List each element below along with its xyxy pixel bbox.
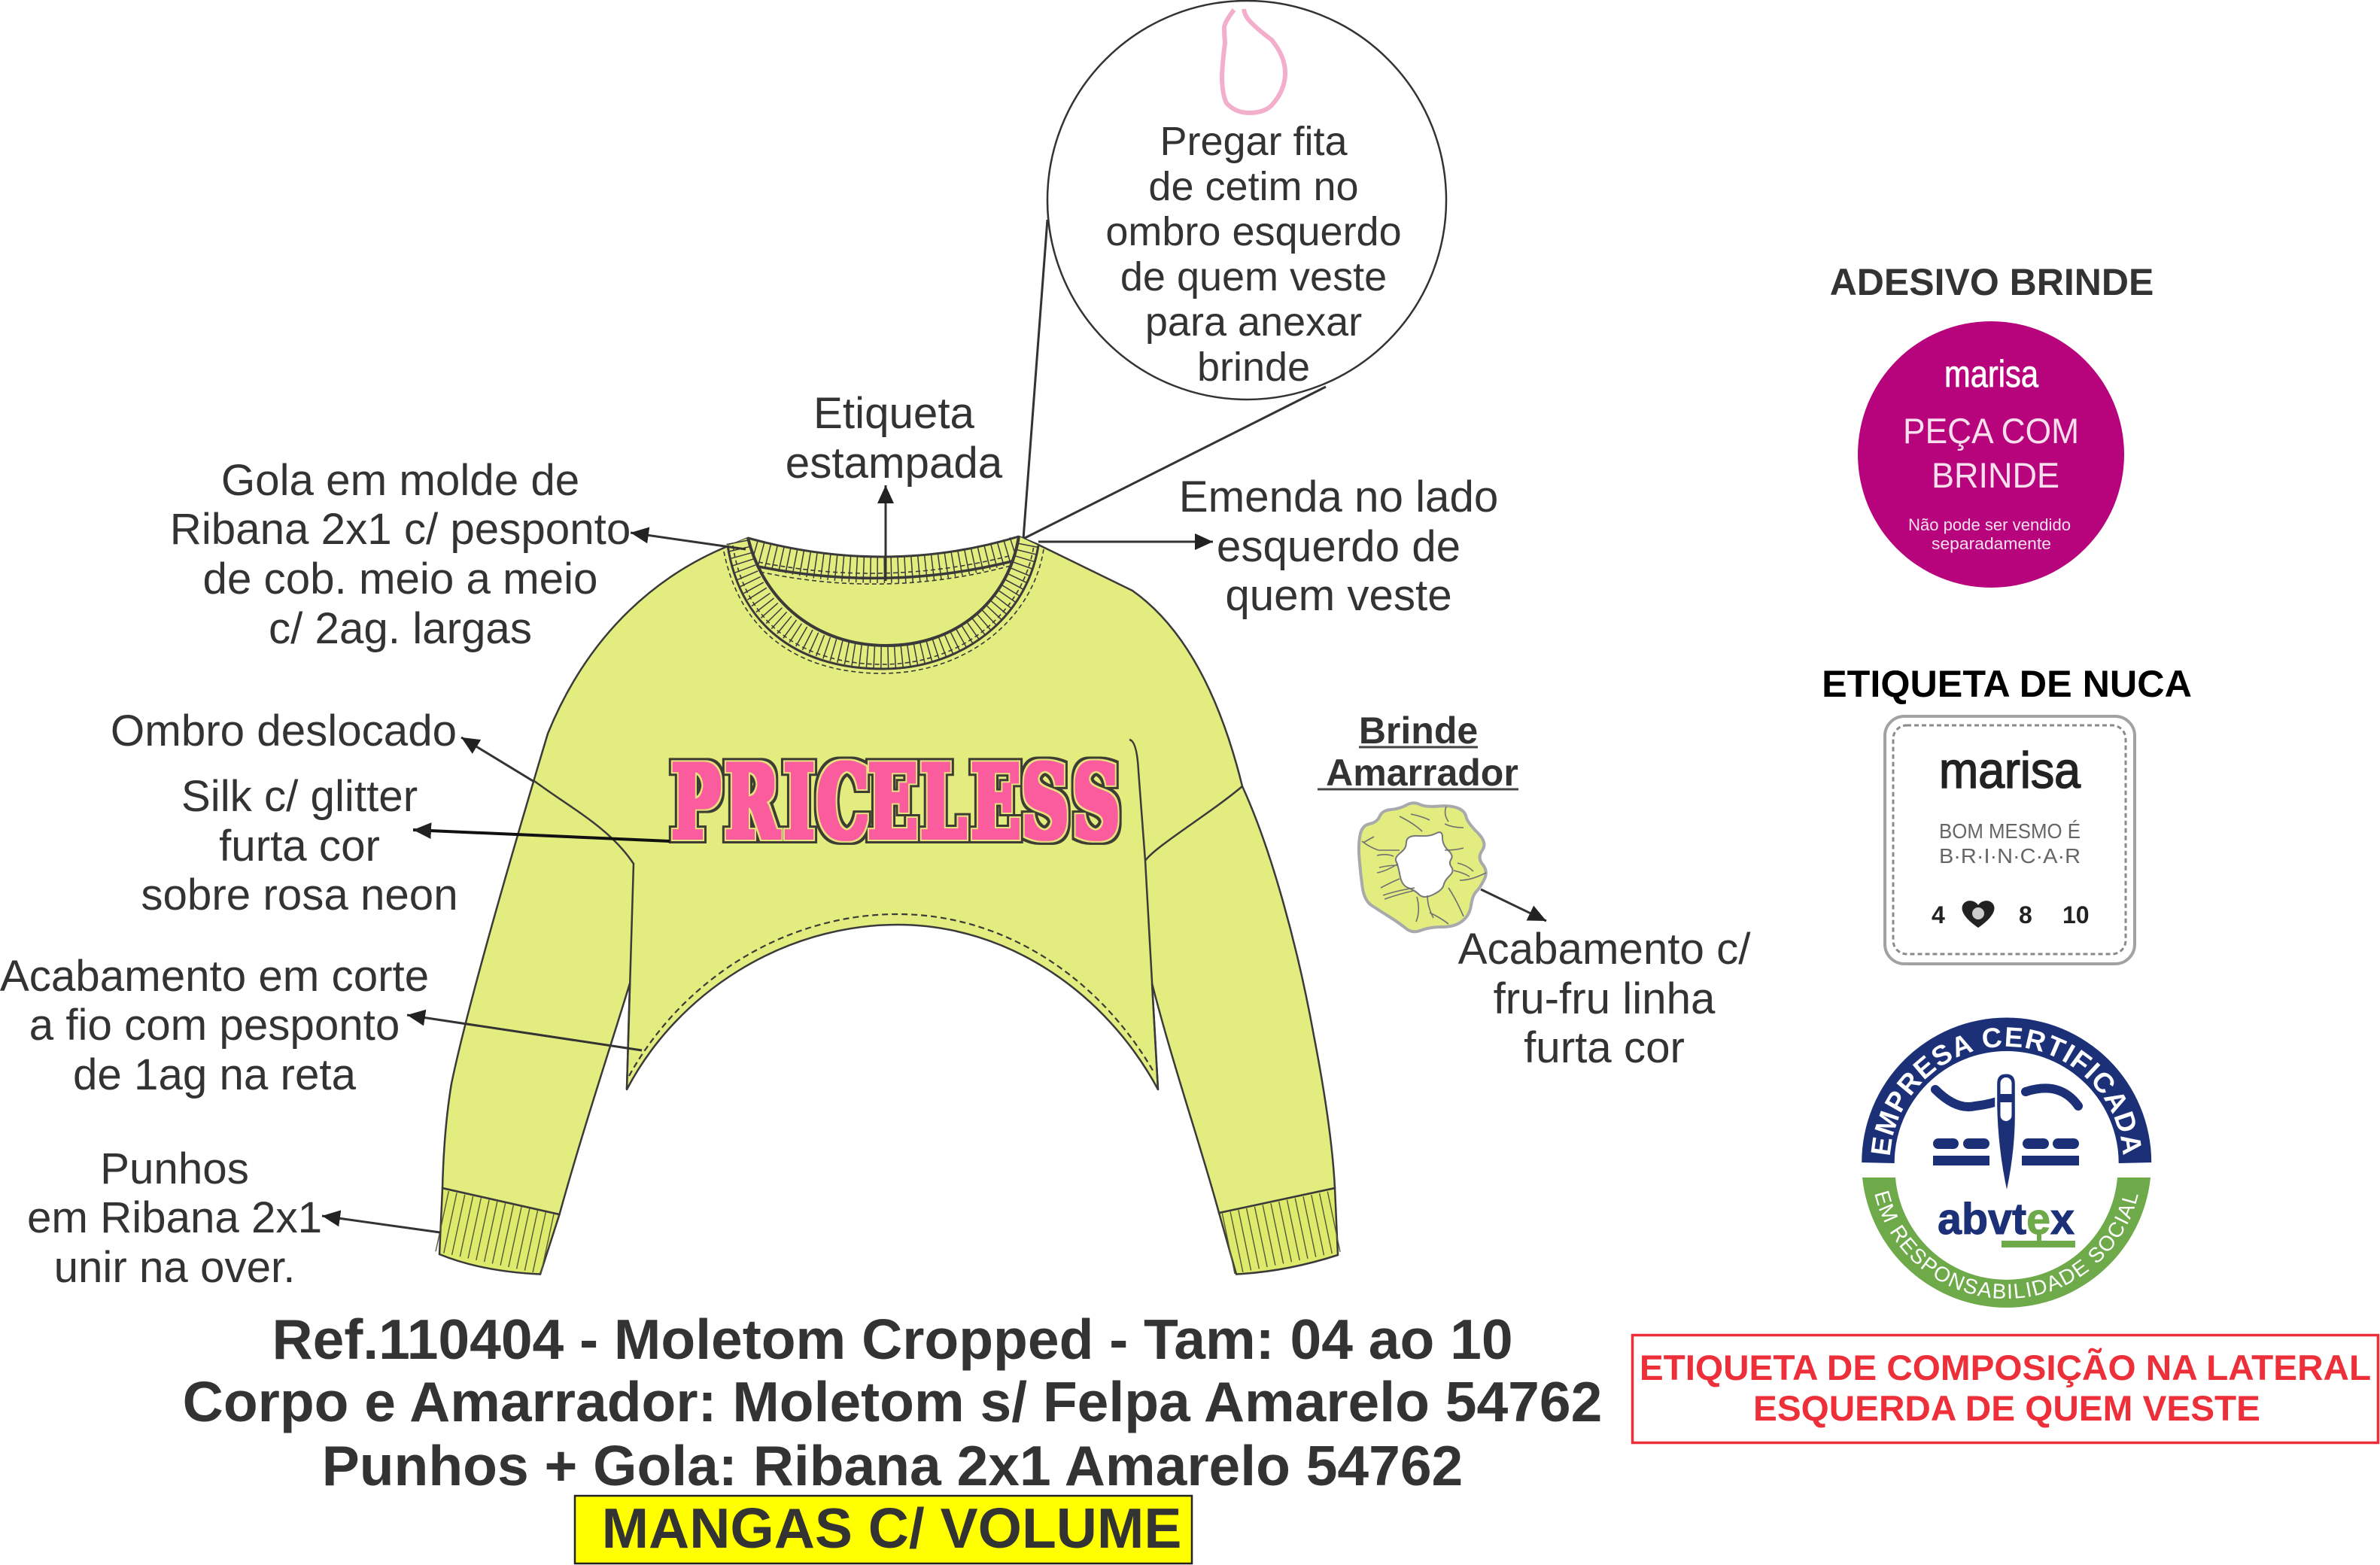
label: punhos: unir na over. xyxy=(54,1243,295,1292)
label: gola: de cob. meio a meio xyxy=(203,555,597,603)
sticker: peça com brinde: PEÇA COM xyxy=(1903,411,2079,451)
callout text: ribbon instruction: para anexar xyxy=(1145,299,1362,345)
neck label: B·R·I·N·C·A·R xyxy=(1939,844,2081,868)
label: acabamento: de 1ag na reta xyxy=(73,1050,357,1099)
left armhole and side seam xyxy=(534,781,634,1089)
neck label: marisa xyxy=(1939,742,2081,799)
callout text: ribbon instruction: Pregar fita xyxy=(1160,119,1348,164)
label: etiqueta estampada xyxy=(786,389,1003,488)
icon: scrunchie xyxy=(1359,803,1486,931)
arrow: acabamento xyxy=(407,1015,642,1050)
sticker: peça com brinde: Não pode ser vendido xyxy=(1908,515,2071,534)
arrow: gola xyxy=(631,533,746,549)
label: punhos: em Ribana 2x1 xyxy=(27,1193,322,1242)
icon: pink ribbon loop xyxy=(1222,9,1285,113)
label: silk: Silk c/ glitter xyxy=(181,772,418,821)
right armhole and side seam xyxy=(1129,740,1242,1089)
highlight: mangas c/ volume: MANGAS C/ VOLUME xyxy=(602,1497,1181,1560)
label: gola xyxy=(170,456,631,653)
callout box: composition label xyxy=(1633,1335,2378,1443)
title block xyxy=(183,1308,1602,1497)
arrow: silk xyxy=(413,830,670,841)
heading: brinde amarrador: Amarrador xyxy=(1326,752,1518,794)
label: etiqueta estampada: estampada xyxy=(786,439,1003,488)
hem stitching xyxy=(629,914,1154,1076)
neck label: 8 xyxy=(2019,901,2032,928)
heading: etiqueta de nuca: ETIQUETA DE NUCA xyxy=(1822,662,2192,705)
neck label xyxy=(1885,716,2135,964)
callout box: composition label: ESQUERDA DE QUEM VESTE xyxy=(1753,1389,2260,1429)
label: gola: Ribana 2x1 c/ pesponto xyxy=(170,505,631,554)
callout text: ribbon instruction: ombro esquerdo xyxy=(1105,209,1402,254)
callout text: ribbon instruction xyxy=(1105,119,1402,390)
callout text: ribbon instruction: brinde xyxy=(1197,345,1310,390)
badge: abvtex: EM RESPONSABILIDADE SOCIAL xyxy=(1875,1190,2138,1299)
sticker: peça com brinde: separadamente xyxy=(1932,534,2051,553)
label: silk: furta cor xyxy=(219,822,380,871)
neck label: 4 xyxy=(1932,901,1945,928)
badge: abvtex xyxy=(1862,1017,2152,1308)
icon: size heart xyxy=(1962,901,1994,928)
label: silk xyxy=(141,772,458,919)
sticker: peça com brinde xyxy=(1858,321,2124,588)
badge: abvtex: abvtex xyxy=(1938,1195,2075,1244)
sticker: peça com brinde: marisa xyxy=(1944,353,2038,395)
silk print: PRICELESS: PRICELESS xyxy=(672,743,1120,862)
badge: abvtex: EMPRESA CERTIFICADA xyxy=(1871,1027,2141,1155)
label: acabamento fru-fru: Acabamento c/ xyxy=(1458,925,1751,974)
front collar rib xyxy=(724,536,1044,673)
title block: Ref.110404 - Moletom Cropped - Tam: 04 ao 10 xyxy=(272,1308,1513,1371)
title block: Punhos + Gola: Ribana 2x1 Amarelo 54762 xyxy=(322,1434,1463,1497)
right cuff xyxy=(1219,1188,1338,1275)
neck label: BOM MESMO É xyxy=(1939,819,2081,843)
neck label: 10 xyxy=(2062,901,2090,928)
left cuff xyxy=(439,1188,560,1275)
label: emenda: esquerdo de xyxy=(1217,522,1461,571)
label: acabamento fru-fru: fru-fru linha xyxy=(1494,974,1716,1023)
label: acabamento fru-fru: furta cor xyxy=(1524,1023,1685,1072)
title block: Corpo e Amarrador: Moletom s/ Felpa Amarelo 54762 xyxy=(183,1370,1602,1433)
label: acabamento xyxy=(0,952,429,1099)
label: gola: Gola em molde de xyxy=(221,456,579,505)
body and sleeves xyxy=(442,536,1335,1214)
icon: needle and thread xyxy=(1933,1073,2079,1195)
arrow: scrunchie xyxy=(1481,889,1546,921)
garment: cropped sweatshirt xyxy=(439,536,1338,1275)
back neck rib xyxy=(748,536,1019,584)
arrow: ombro xyxy=(461,737,534,782)
label: silk: sobre rosa neon xyxy=(141,871,458,919)
callout circle: satin ribbon xyxy=(1047,1,1446,400)
arrow: etiqueta xyxy=(885,485,886,581)
heading: adesivo brinde: ADESIVO BRINDE xyxy=(1830,261,2154,303)
arrow: punhos xyxy=(322,1216,440,1232)
arrow: emenda xyxy=(1038,540,1213,543)
callout text: ribbon instruction: de cetim no xyxy=(1148,164,1359,209)
callout leader lines xyxy=(1023,220,1326,539)
label: emenda: quem veste xyxy=(1225,571,1452,620)
heading: brinde amarrador xyxy=(1318,710,1518,794)
callout text: ribbon instruction: de quem veste xyxy=(1120,254,1387,299)
heading: brinde amarrador: Brinde xyxy=(1359,710,1478,752)
label: acabamento: Acabamento em corte xyxy=(0,952,429,1001)
label: emenda: Emenda no lado xyxy=(1179,473,1498,521)
label: etiqueta estampada: Etiqueta xyxy=(813,389,975,438)
label: emenda xyxy=(1179,473,1498,620)
label: punhos: Punhos xyxy=(100,1144,249,1193)
label: gola: c/ 2ag. largas xyxy=(269,604,532,653)
label: ombro deslocado: Ombro deslocado xyxy=(111,707,457,755)
label: punhos xyxy=(27,1144,322,1292)
label: acabamento: a fio com pesponto xyxy=(29,1001,400,1050)
sticker: peça com brinde: BRINDE xyxy=(1932,455,2059,495)
callout box: composition label: ETIQUETA DE COMPOSIÇÃO NA LATERAL xyxy=(1640,1347,2371,1388)
label: acabamento fru-fru xyxy=(1458,925,1751,1072)
